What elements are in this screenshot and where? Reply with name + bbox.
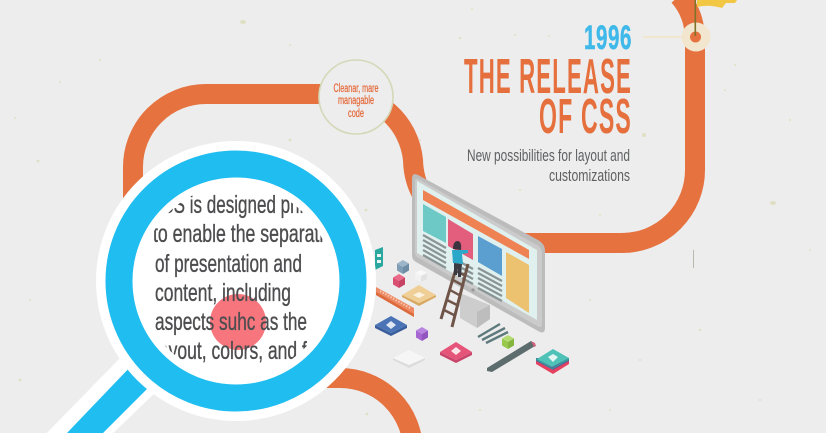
description: New possibilities for layout and [467,146,630,165]
tile: tan [402,285,436,306]
monitor illustration [412,174,545,332]
magnified text: CSS is designed primarily [150,191,345,219]
cube: purple [416,327,428,341]
magnified text: to enable the separation [153,220,343,248]
small vertical tick [693,250,694,268]
red highlight [210,294,266,350]
magnified text [154,194,322,362]
callout: cleaner code [319,60,393,134]
cube: green [502,335,514,349]
magnified text: content, including [155,279,291,307]
teal block [375,247,383,270]
title [464,50,632,144]
lens ring [96,141,376,421]
cube: white [415,270,427,282]
orange timeline path: bottom curve [300,378,413,433]
callout: cleaner code: code [348,108,364,120]
stripes [478,324,508,343]
tile stack [536,349,569,374]
magnifying glass [40,141,376,433]
magnified text: layout, colors, and fonts [155,337,340,365]
ruler [376,287,414,317]
cube: grey blue [397,260,409,274]
magnified text: of presentation and [155,250,302,278]
description: customizations [549,166,630,185]
tile: blue [375,316,407,336]
year marker with flag [643,0,737,52]
orange timeline path: upper right [500,0,695,243]
infographic canvas: OF CSS [539,90,632,144]
pencil [487,341,536,372]
year label: 1996 [584,19,632,57]
orange timeline path: upper left loop [133,94,450,222]
infographic canvas: THE RELEASE [464,50,632,104]
isometric design blocks [375,247,569,374]
tile: pink [440,342,472,363]
ladder and person [441,241,468,327]
tile: white [393,350,425,368]
cube: pink [393,274,405,288]
magnifier handle [40,356,160,433]
description [467,146,630,185]
callout: cleaner code: managable [338,95,374,107]
callout: cleaner code: Cleanar, mare [334,83,378,95]
magnified text: aspects suhc as the [155,308,307,336]
